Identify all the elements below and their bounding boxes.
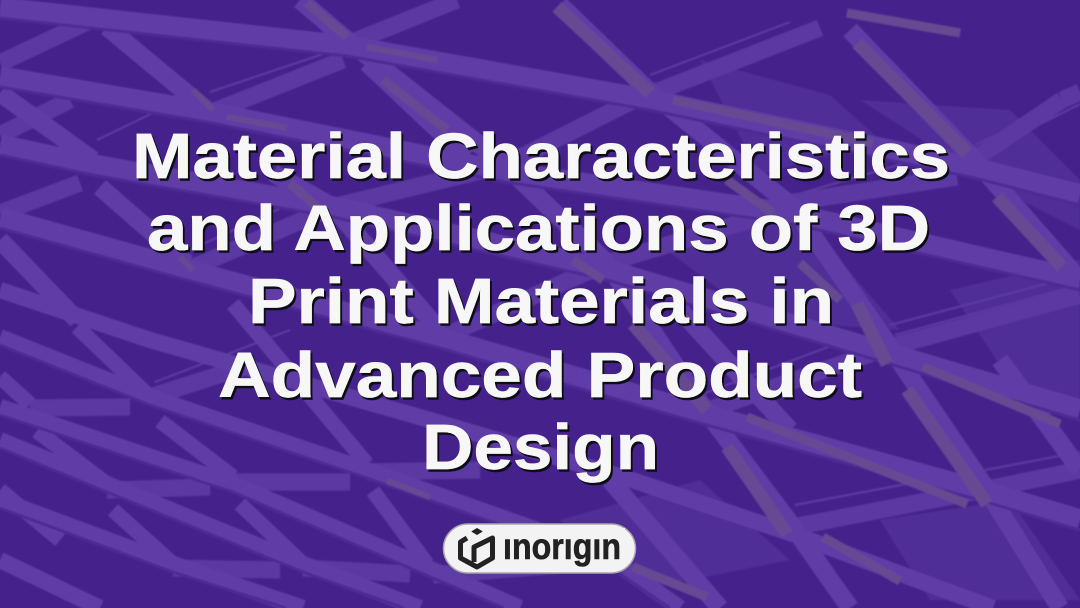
frame lines inside panes xyxy=(97,22,1080,505)
wordmark: inorigin xyxy=(503,526,621,567)
title: Material Characteristics xyxy=(132,120,950,192)
title: Advanced Product xyxy=(218,339,862,411)
title xyxy=(132,120,950,483)
gray highlights on beams xyxy=(557,7,1062,534)
title: and Applications of 3D xyxy=(147,192,930,264)
slightly lighter glass panes on the right xyxy=(560,60,1080,600)
logo: inorigin pill xyxy=(444,524,636,573)
icon: hexagonal cube xyxy=(460,528,492,567)
title: Print Materials in xyxy=(248,265,834,337)
title: Design xyxy=(422,411,659,483)
